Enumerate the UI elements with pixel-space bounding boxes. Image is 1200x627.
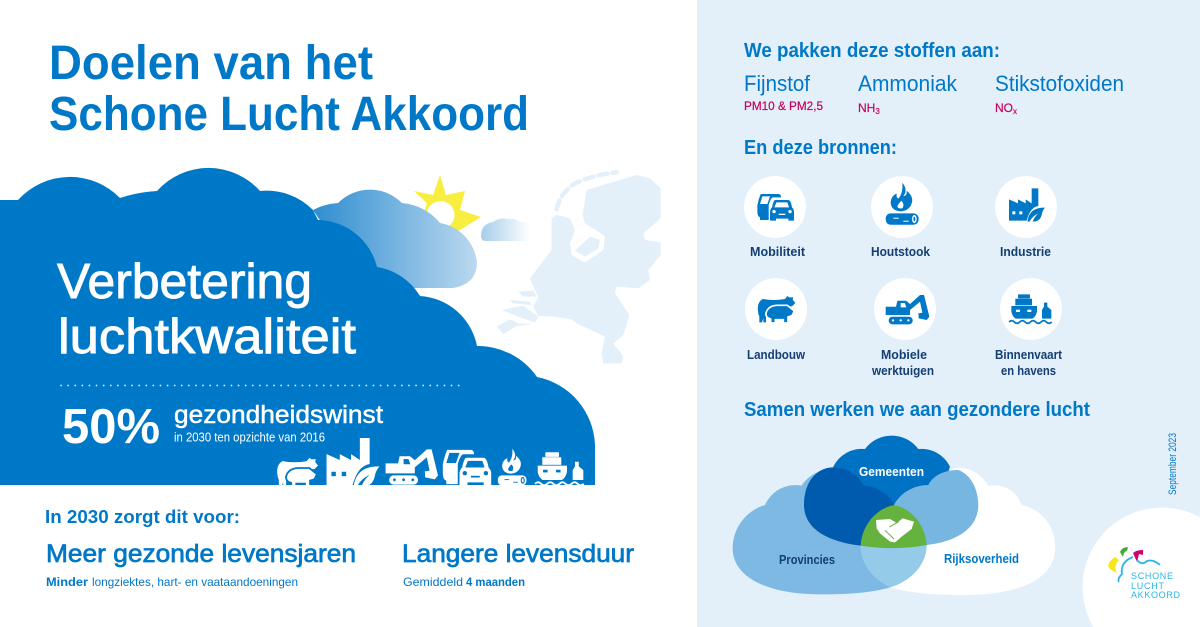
icon: handshake xyxy=(876,518,914,542)
source: industrie xyxy=(995,176,1057,259)
benefit: langere levensduur xyxy=(402,540,634,589)
label: provincies: Provincies xyxy=(779,553,835,567)
source: binnenvaart en havens: Binnenvaart xyxy=(995,348,1063,362)
source: landbouw xyxy=(745,278,807,362)
logo: schone lucht akkoord: LUCHT xyxy=(1131,581,1164,591)
stat: 50% gezondheidswinst xyxy=(62,400,383,454)
source: mobiele werktuigen xyxy=(871,278,936,378)
stat: 50% gezondheidswinst: 50% xyxy=(62,400,160,454)
heading: stoffen: We pakken deze stoffen aan: xyxy=(744,40,1000,62)
source: mobiliteit: Mobiliteit xyxy=(750,245,806,259)
heading: verbetering luchtkwaliteit xyxy=(57,255,356,364)
substance: stikstofoxiden: Stikstofoxiden xyxy=(995,71,1124,96)
icon row: sources in white xyxy=(277,438,584,487)
light gradient cloud xyxy=(313,190,477,288)
label: gemeenten: Gemeenten xyxy=(859,465,924,479)
label: rijksoverheid: Rijksoverheid xyxy=(944,552,1019,566)
substance: fijnstof: Fijnstof xyxy=(744,71,811,96)
date label: September 2023 xyxy=(1167,433,1179,495)
logo: schone lucht akkoord: SCHONE xyxy=(1131,571,1173,581)
stat: 50% gezondheidswinst: in 2030 ten opzichte van 2016 xyxy=(174,430,325,444)
substance: ammoniak xyxy=(858,71,958,116)
benefit: langere levensduur: Gemiddeld xyxy=(403,575,463,589)
venn diagram of clouds xyxy=(733,436,1055,595)
heading: in 2030 zorgt dit voor: In 2030 zorgt dit voor: xyxy=(45,507,240,527)
logo: schone lucht akkoord: AKKOORD xyxy=(1131,590,1180,600)
heading: bronnen: En deze bronnen: xyxy=(744,137,897,159)
source: landbouw: Landbouw xyxy=(747,348,805,362)
benefit: langere levensduur: 4 maanden xyxy=(466,575,525,589)
source: binnenvaart en havens xyxy=(995,278,1063,378)
source: mobiele werktuigen: Mobiele xyxy=(881,348,927,362)
source: mobiliteit xyxy=(744,176,806,259)
map of the Netherlands xyxy=(497,172,661,363)
substance: fijnstof xyxy=(744,71,823,113)
source: binnenvaart en havens: en havens xyxy=(1001,364,1056,378)
source: houtstook xyxy=(871,176,933,259)
panel: left white background xyxy=(0,0,697,627)
substance: ammoniak: NH xyxy=(858,101,875,115)
substance: ammoniak: Ammoniak xyxy=(858,71,958,96)
panel: right light blue background xyxy=(697,0,1200,627)
source: mobiele werktuigen: werktuigen xyxy=(871,364,934,378)
icon: sun xyxy=(414,175,481,240)
heading: samen werken: Samen werken we aan gezondere lucht xyxy=(744,399,1090,421)
icon: small cloud xyxy=(481,218,530,241)
benefit: meer gezonde levensjaren: longziektes, hart- en vaataandoeningen xyxy=(92,575,298,589)
stat: 50% gezondheidswinst: gezondheidswinst xyxy=(174,401,383,429)
substance: stikstofoxiden xyxy=(995,71,1124,116)
title: Doelen van het xyxy=(49,37,373,90)
heading: verbetering luchtkwaliteit: Verbetering xyxy=(57,255,312,309)
title: Schone Lucht Akkoord xyxy=(49,88,529,141)
substance: stikstofoxiden: NO xyxy=(995,101,1013,115)
substance: stikstofoxiden: x xyxy=(1013,107,1017,116)
logo: schone lucht akkoord xyxy=(1083,508,1200,627)
benefit: meer gezonde levensjaren: Meer gezonde levensjaren xyxy=(46,540,356,568)
substance: ammoniak: 3 xyxy=(875,107,880,116)
heading: verbetering luchtkwaliteit: luchtkwaliteit xyxy=(58,310,356,364)
benefit: langere levensduur: Langere levensduur xyxy=(402,540,634,568)
source: houtstook: Houtstook xyxy=(871,245,930,259)
benefit: meer gezonde levensjaren xyxy=(46,540,356,589)
benefit: meer gezonde levensjaren: Minder xyxy=(46,575,88,589)
main dark blue cloud xyxy=(0,168,595,485)
source: industrie: Industrie xyxy=(1000,245,1051,259)
title xyxy=(49,37,529,141)
substance: fijnstof: PM10 & PM2,5 xyxy=(744,99,823,113)
